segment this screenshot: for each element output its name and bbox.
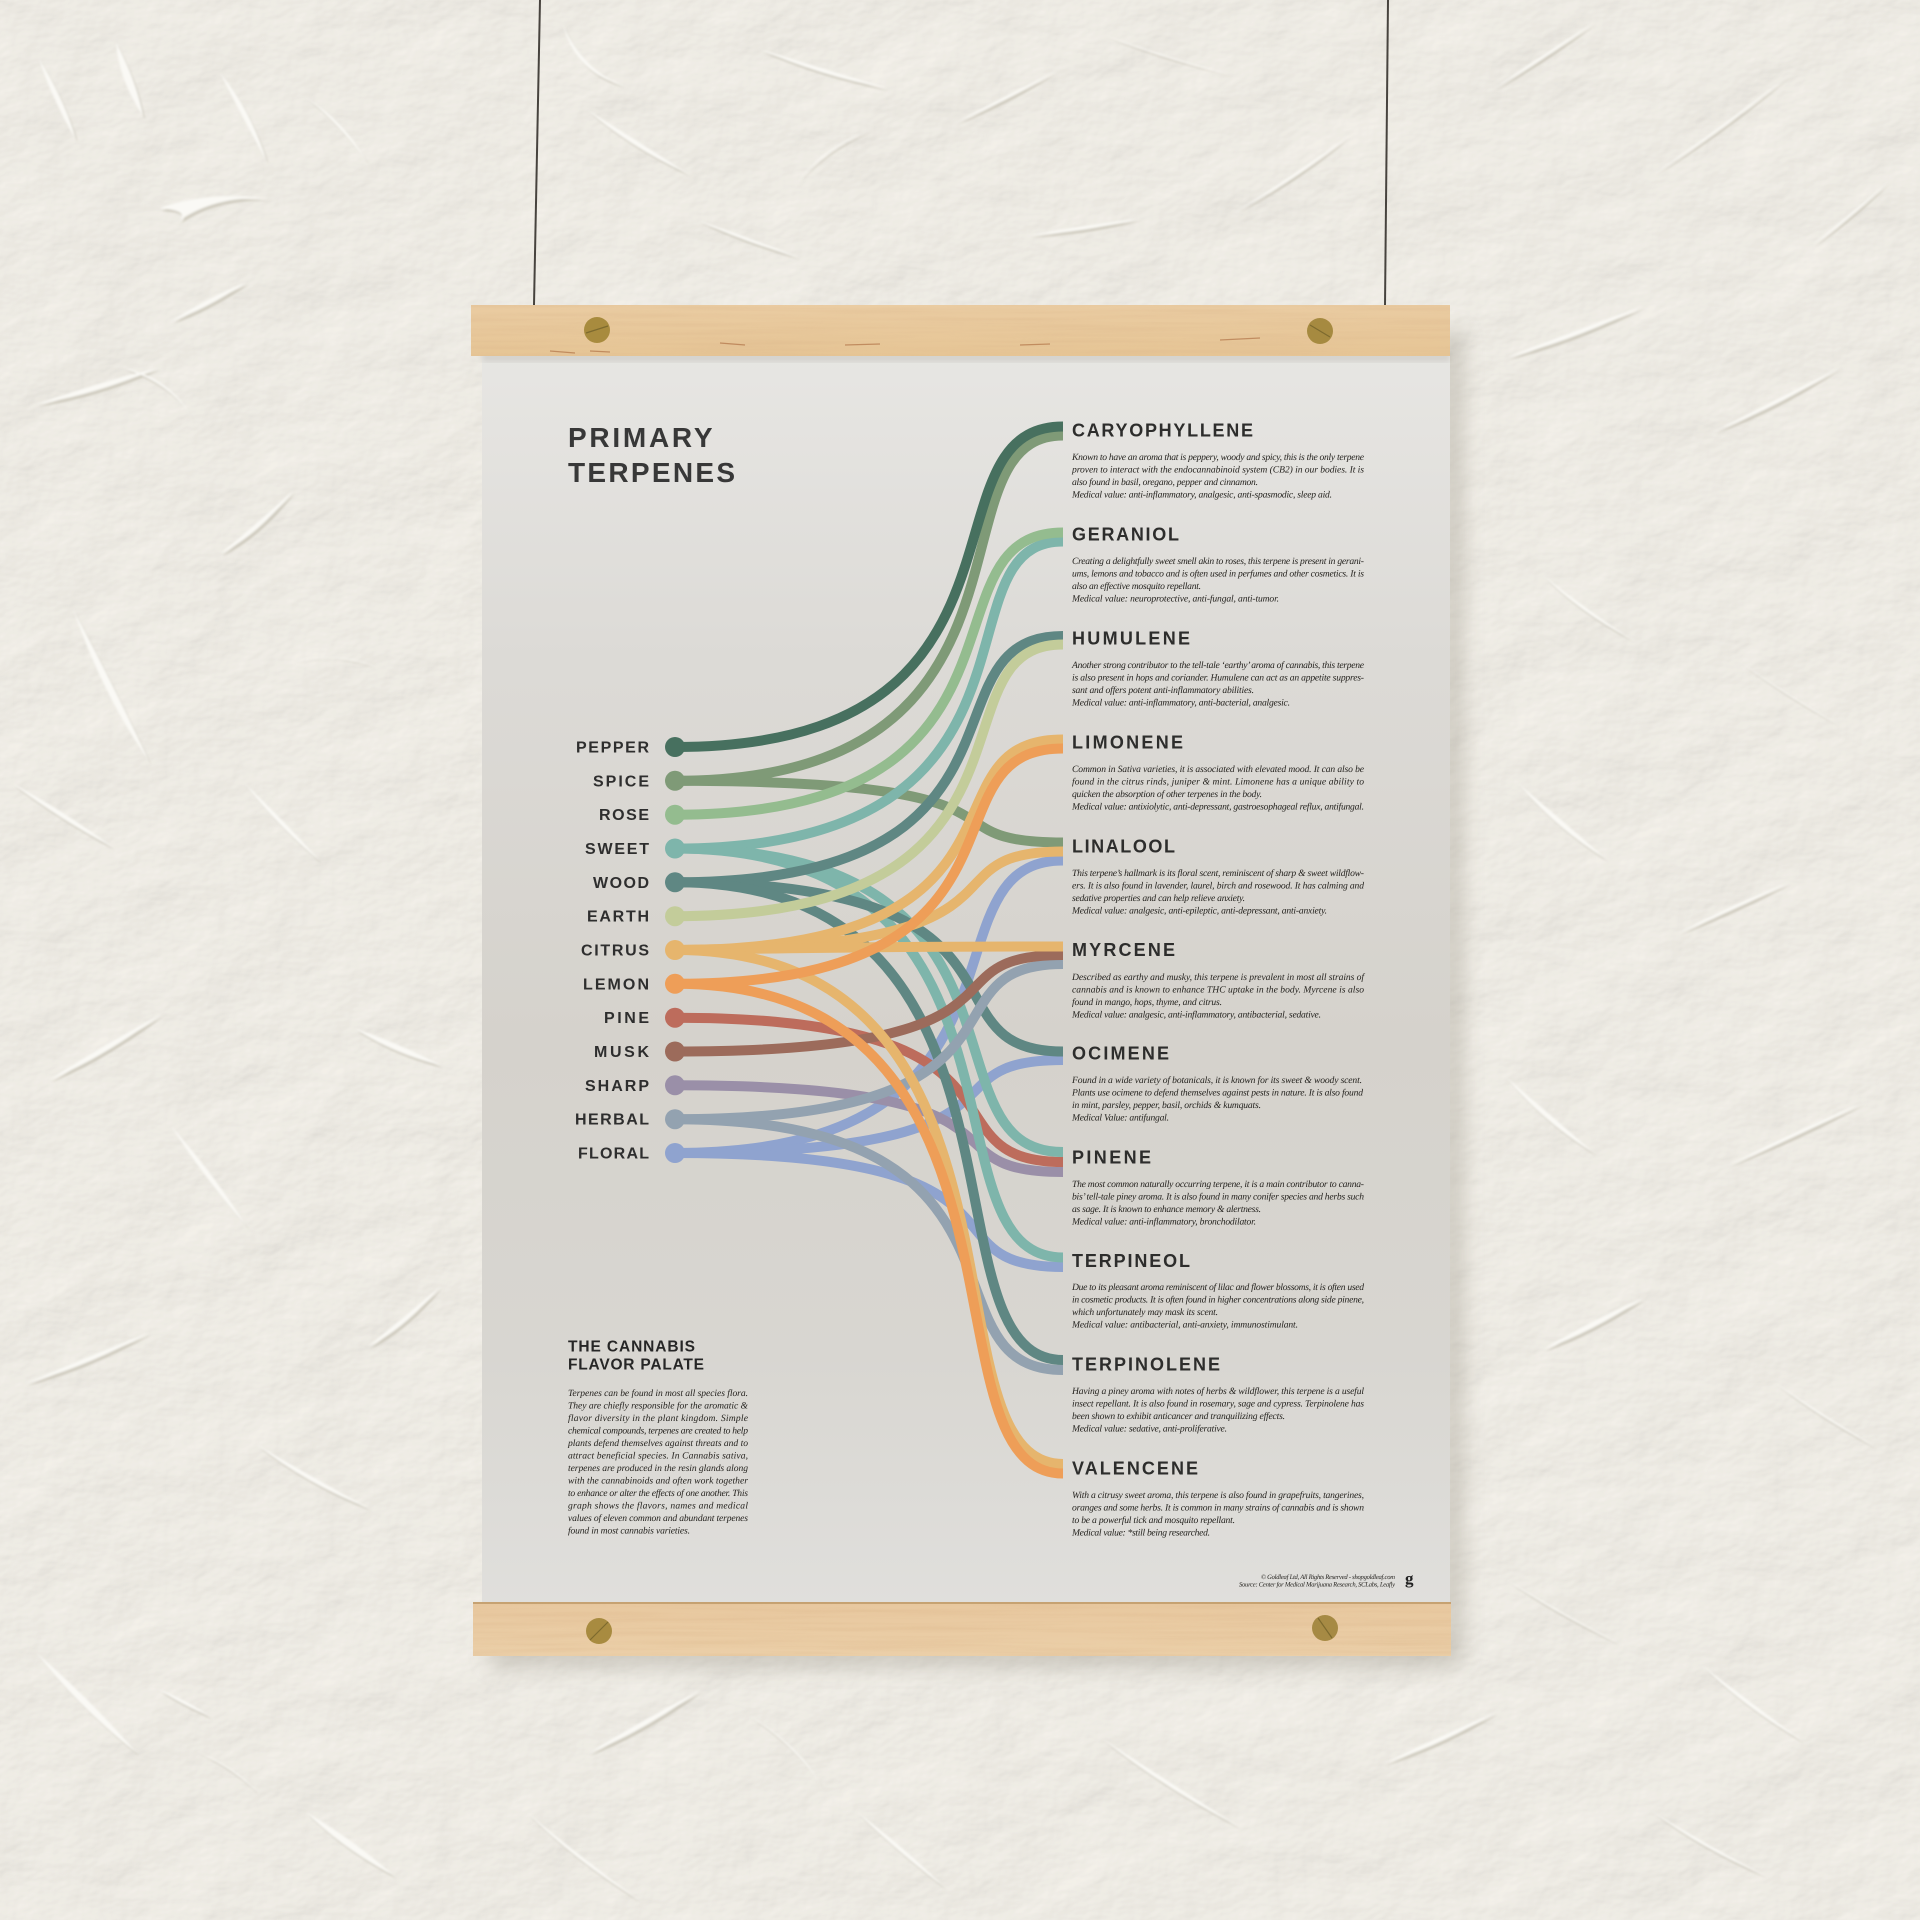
flavor dots [665, 737, 685, 1163]
terpene: Linalool: Medical value: analgesic, anti-epileptic, anti-depressant, anti-anxiety. [1071, 906, 1327, 916]
terpene: Pinene: PINENE [1072, 1148, 1151, 1168]
terpene: Ocimene: in mint, parsley, pepper, basil, orchids & kumquats. [1072, 1100, 1261, 1111]
top wooden hanger bar [471, 305, 1450, 356]
heading: the cannabis flavor palate: FLAVOR PALATE [568, 1356, 704, 1374]
terpene: Geraniol: ums, lemons and tobacco and is often used in perfumes and other cosmetics. It is [1072, 568, 1364, 580]
terpene: Humulene: Medical value: anti-inflammatory, anti-bacterial, analgesic. [1071, 698, 1290, 708]
terpene: Humulene: Another strong contributor to the tell-tale ‘earthy’ aroma of cannabis, this terpene [1071, 660, 1365, 671]
intro paragraph: They are chiefly responsible for the aromatic & [568, 1400, 749, 1412]
terpene: Pinene [1071, 1148, 1364, 1228]
flavor labels: SWEET [585, 841, 649, 858]
terpene: Valencene: With a citrusy sweet aroma, this terpene is also found in grapefruits, tangerines, [1072, 1490, 1364, 1501]
terpene: Valencene: VALENCENE [1072, 1458, 1198, 1478]
terpene: Geraniol: also an effective mosquito repellant. [1072, 581, 1201, 592]
intro paragraph: flavor diversity in the plant kingdom. Simple [568, 1413, 749, 1424]
terpene: Ocimene: Medical Value: antifungal. [1071, 1112, 1169, 1124]
terpene: Linalool: ers. It is also found in lavender, laurel, birch and rosewood. It has calming and [1072, 880, 1364, 892]
icon: brass screw bottom left [586, 1618, 612, 1644]
intro paragraph: terpenes are produced in the resin glands along [568, 1463, 748, 1474]
terpene: Caryophyllene: also found in basil, oregano, pepper and cinnamon. [1072, 477, 1258, 488]
terpene: Geraniol: Medical value: neuroprotective, anti-fungal, anti-tumor. [1071, 594, 1279, 604]
flavor labels: PINE [604, 1010, 649, 1027]
terpene: Limonene: Medical value: antixiolytic, anti-depressant, gastroesophageal reflux, antifungal. [1071, 802, 1364, 812]
flavor labels: SHARP [585, 1078, 649, 1095]
terpene: Ocimene [1071, 1044, 1363, 1124]
terpene: Ocimene: OCIMENE [1072, 1044, 1169, 1064]
poster shadow on wall [490, 330, 1462, 1666]
icon: brass screw top left [584, 317, 610, 343]
intro paragraph: plants defend themselves against threats and to [567, 1438, 748, 1449]
terpene: Limonene: quicken the absorption of other terpenes in the body. [1072, 789, 1262, 800]
intro paragraph: attract beneficial species. In Cannabis sativa, [568, 1450, 748, 1462]
flavor labels: MUSK [594, 1044, 649, 1061]
terpene: Terpineol: TERPINEOL [1072, 1251, 1190, 1271]
terpene: Myrcene: found in mango, hops, thyme, and citrus. [1072, 997, 1222, 1008]
title: PRIMARY [568, 422, 713, 453]
terpene: Humulene [1071, 628, 1365, 708]
terpene: Terpineol: Due to its pleasant aroma reminiscent of lilac and flower blossoms, it is often used [1071, 1282, 1364, 1293]
terpene: Terpinolene [1071, 1354, 1364, 1434]
icon: brass screw top right [1307, 318, 1333, 344]
credits and source: © Goldleaf Ltd, All Rights Reserved - shopgoldleaf.com [1261, 1574, 1395, 1581]
terpene: Valencene: to be a powerful tick and mosquito repellant. [1072, 1515, 1235, 1526]
terpene: Humulene: sant and offers potent anti-inflammatory abilities. [1072, 685, 1254, 696]
terpene: Linalool: LINALOOL [1072, 836, 1175, 856]
flavor labels: SPICE [593, 773, 649, 790]
terpene: Geraniol: GERANIOL [1072, 524, 1179, 544]
flavor labels: LEMON [583, 976, 649, 993]
terpene: Terpinolene: Medical value: sedative, anti-proliferative. [1071, 1424, 1227, 1434]
terpene: Valencene: oranges and some herbs. It is common in many strains of cannabis and is shown [1072, 1502, 1364, 1514]
credits and source [1239, 1574, 1395, 1588]
terpene: Humulene: HUMULENE [1072, 628, 1190, 648]
flavor labels: CITRUS [581, 942, 649, 960]
terpene: Geraniol: Creating a delightfully sweet smell akin to roses, this terpene is present in gerani- [1072, 556, 1364, 567]
title: TERPENES [568, 457, 735, 488]
terpene: Pinene: Medical value: anti-inflammatory, bronchodilator. [1071, 1216, 1256, 1228]
intro paragraph: with the cannabinoids and often work together [568, 1476, 748, 1486]
flavor labels: PEPPER [576, 740, 649, 756]
heading: the cannabis flavor palate: THE CANNABIS [568, 1338, 695, 1356]
shadow under top bar [482, 352, 1450, 362]
intro paragraph: found in most cannabis varieties. [568, 1526, 690, 1536]
terpene: Ocimene: Plants use ocimene to defend themselves against pests in nature. It is also found [1071, 1088, 1363, 1098]
terpene: Terpineol: Medical value: antibacterial, anti-anxiety, immunostimulant. [1071, 1320, 1298, 1330]
terpene: Linalool: This terpene’s hallmark is its floral scent, reminiscent of sharp & sweet wildflow- [1072, 868, 1364, 879]
bottom wooden hanger bar [473, 1602, 1451, 1656]
terpene: Myrcene [1071, 940, 1365, 1020]
credits and source: Source: Center for Medical Marijuana Research, SCLabs, Leafly [1239, 1582, 1395, 1588]
terpene: Terpinolene: been shown to exhibit anticancer and tranquilizing effects. [1072, 1411, 1285, 1422]
terpene: Valencene: Medical value: *still being researched. [1071, 1528, 1210, 1538]
terpene: Valencene [1071, 1458, 1364, 1538]
flavor labels: WOOD [593, 875, 649, 892]
intro paragraph: graph shows the flavors, names and medical [568, 1500, 748, 1512]
intro paragraph: to enhance or alter the effects of one another. This [568, 1488, 748, 1499]
terpene: Humulene: is also present in hops and coriander. Humulene can act as an appetite suppres- [1072, 672, 1364, 684]
terpene: Limonene [1071, 732, 1365, 812]
terpene: Caryophyllene: proven to interact with the endocannabinoid system (CB2) in our bodies. It is [1071, 464, 1364, 476]
flavor labels: ROSE [599, 807, 649, 824]
terpene: Linalool [1071, 836, 1364, 916]
flavor labels: EARTH [587, 909, 649, 926]
terpene: Limonene: found in the citrus rinds, juniper & mint. Limonene has a unique ability to [1072, 776, 1364, 788]
terpene: Limonene: Common in Sativa varieties, it is associated with elevated mood. It can also be [1072, 764, 1365, 775]
intro paragraph: values of eleven common and abundant terpenes [568, 1513, 748, 1524]
terpene: Terpineol: in cosmetic products. It is often found in higher concentrations along side pinene, [1072, 1294, 1364, 1306]
terpene: Terpineol: which unfortunately may mask its scent. [1072, 1307, 1218, 1318]
terpene: Ocimene: Found in a wide variety of botanicals, it is known for its sweet & woody scent. [1071, 1075, 1362, 1086]
terpene: Linalool: sedative properties and can help relieve anxiety. [1072, 893, 1245, 904]
terpene: Caryophyllene: Medical value: anti-inflammatory, analgesic, anti-spasmodic, sleep aid. [1071, 490, 1332, 500]
flavor labels: FLORAL [578, 1146, 649, 1162]
terpene: Pinene: as sage. It is known to enhance memory & alertness. [1072, 1204, 1261, 1215]
terpene: Terpinolene: insect repellant. It is also found in rosemary, sage and cypress. Terpinolene has [1072, 1398, 1364, 1410]
terpene: Limonene: LIMONENE [1072, 732, 1183, 752]
terpene: Terpinolene: Having a piney aroma with notes of herbs & wildflower, this terpene is a useful [1071, 1386, 1364, 1397]
terpene: Myrcene: cannabis and is known to enhance THC uptake in the body. Myrcene is also [1072, 984, 1364, 996]
terpene: Geraniol [1071, 524, 1364, 604]
icon: brass screw bottom right [1312, 1615, 1338, 1641]
intro paragraph: Terpenes can be found in most all species flora. [568, 1388, 748, 1399]
flavor to terpene flow chart [675, 426, 1063, 1474]
terpene: Myrcene: Medical value: analgesic, anti-inflammatory, antibacterial, sedative. [1071, 1010, 1321, 1020]
terpene: Terpinolene: TERPINOLENE [1072, 1354, 1220, 1374]
intro paragraph [567, 1388, 749, 1536]
terpene: Caryophyllene: Known to have an aroma that is peppery, woody and spicy, this is the only terpene [1071, 452, 1365, 463]
terpene: Caryophyllene: CARYOPHYLLENE [1072, 420, 1253, 440]
logo: g: g [1405, 1569, 1414, 1588]
flavor labels: HERBAL [575, 1112, 649, 1129]
poster paper [482, 350, 1450, 1606]
flavor labels [575, 740, 649, 1162]
hanging strings [534, 0, 1388, 306]
terpene: Pinene: bis’ tell-tale piney aroma. It is also found in many conifer species and herbs such [1072, 1192, 1364, 1202]
intro paragraph: chemical compounds, terpenes are created to help [568, 1426, 748, 1436]
terpene: Myrcene: MYRCENE [1072, 940, 1175, 960]
terpene: Myrcene: Described as earthy and musky, this terpene is prevalent in most all strains of [1071, 972, 1365, 983]
terpene: Pinene: The most common naturally occurring terpene, it is a main contributor to canna- [1072, 1179, 1364, 1190]
terpene: Caryophyllene [1071, 420, 1365, 500]
terpene: Terpineol [1071, 1251, 1364, 1330]
